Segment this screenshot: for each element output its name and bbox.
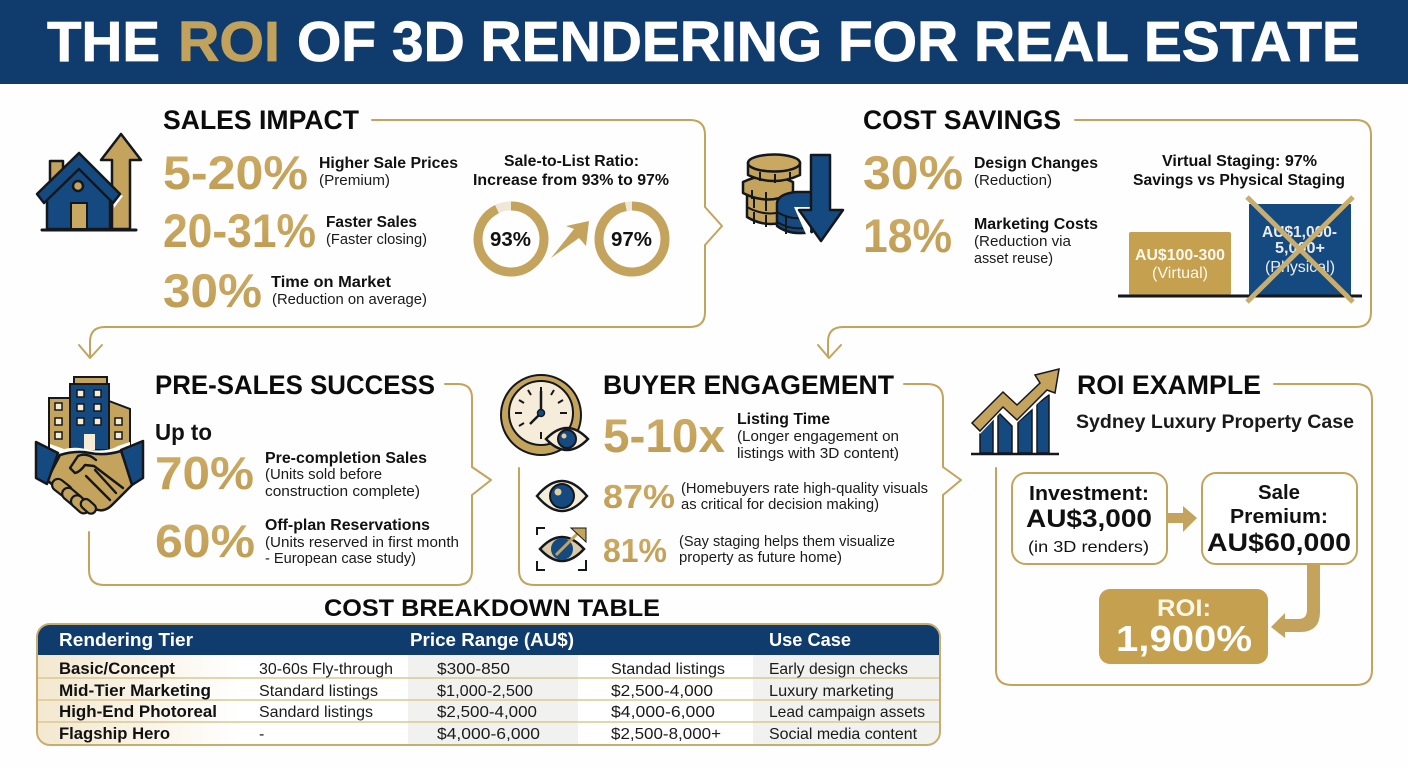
table row: high-end photoreal: $4,000-6,000 [611,704,715,721]
stat: 81% staging: 81% [603,532,667,569]
icon: eye [537,481,587,511]
stat: off-plan reservations: (Units reserved in first month [265,535,459,551]
stat: off-plan reservations: - European case study) [265,551,416,567]
table row: basic/concept: Basic/Concept [59,660,176,678]
table row: mid-tier marketing: Mid-Tier Marketing [59,682,211,700]
icon: eye with framing brackets and arrow [537,528,586,570]
box: sale premium: Premium: [1230,506,1328,528]
bar: virtual staging cost [1129,232,1231,295]
stat: higher sale prices [163,146,458,199]
stat: time on market: 30% [163,264,262,317]
stat: marketing costs: (Reduction via [974,234,1072,250]
stat: 81% staging: (Say staging helps them visualize [679,534,895,550]
stat: listing time: listings with 3D content) [737,446,899,462]
table header row: Use Case [769,630,851,650]
stat: faster sales [163,204,427,257]
box: investment: Investment: [1029,483,1149,505]
stat: marketing costs [863,209,1098,267]
stat: pre-completion sales: 70% [155,447,254,499]
stat: marketing costs: Marketing Costs [974,216,1098,233]
stat: listing time: 5-10x [603,409,725,462]
sale-to-list ratio heading [473,153,669,189]
table row: high-end photoreal: Sandard listings [259,704,373,721]
table row: mid-tier marketing: $1,000-2,500 [437,683,533,700]
stat: listing time: Listing Time [737,411,830,428]
table row: high-end photoreal: Lead campaign assets [769,704,925,721]
box: investment: AU$3,000 [1026,505,1152,533]
stat: design changes: Design Changes [974,155,1098,172]
stat: 87% high-quality visuals [603,478,928,515]
table header row [59,630,851,650]
title banner: THE [47,10,160,74]
bar: physical staging cost, crossed out: (Physical) [1265,259,1335,276]
donut chart: 93% [478,206,544,272]
table row: basic/concept: Standad listings [611,661,725,678]
donut chart: 93%: 93% [490,229,531,251]
stat: pre-completion sales: construction complete) [265,484,420,500]
stat: 81% staging [603,532,895,569]
table row: basic/concept [59,660,908,678]
table row: flagship hero: Flagship Hero [59,725,170,743]
icon: coins with down arrow [743,154,843,248]
table row: high-end photoreal: $2,500-4,000 [437,704,537,721]
stat: off-plan reservations [155,515,459,567]
arrow: premium to roi [1271,565,1320,638]
stat: faster sales: 20-31% [163,204,316,257]
virtual staging heading: Virtual Staging: 97% [1162,153,1317,170]
heading: sales impact: SALES IMPACT [163,105,359,135]
stat: 81% staging: property as future home) [679,550,842,566]
stat: pre-completion sales: Up to [155,419,212,445]
box: sale premium: Sale [1258,482,1300,504]
table row: flagship hero [59,725,918,743]
stat: design changes: (Reduction) [974,173,1052,189]
bar: physical staging cost, crossed out [1118,197,1362,302]
stat: 87% high-quality visuals: (Homebuyers rate high-quality visuals [681,481,928,497]
table: cost breakdown [37,624,940,745]
heading: buyer engagement: BUYER ENGAGEMENT [603,370,894,400]
stat: time on market: Time on Market [271,274,392,291]
table row: mid-tier marketing: Standard listings [259,683,378,700]
box: investment [1012,473,1167,564]
stat: 87% high-quality visuals: 87% [603,478,675,515]
box: roi result: ROI: [1157,595,1211,622]
table row: flagship hero: - [259,726,264,743]
stat: marketing costs: 18% [863,209,952,262]
stat: higher sale prices: Higher Sale Prices [319,155,458,172]
arrow: investment to premium [1167,506,1197,532]
table row: basic/concept: 30-60s Fly-through [259,661,393,678]
donut chart: 97%: 97% [611,229,652,251]
subheading: sydney case: Sydney Luxury Property Case [1076,412,1354,433]
panel: pre-sales success [36,370,491,585]
table row: basic/concept: Early design checks [769,661,908,678]
bar: virtual staging cost: (Virtual) [1152,265,1208,282]
stat: design changes: 30% [863,146,963,199]
virtual staging heading [1133,153,1345,189]
stat: 87% high-quality visuals: as critical for decision making) [681,497,879,513]
stat: time on market: (Reduction on average) [272,292,427,308]
box: sale premium [1202,473,1357,564]
table row: mid-tier marketing: Luxury marketing [769,683,894,700]
sale-to-list ratio heading: Sale-to-List Ratio: [504,153,639,170]
panel: cost savings [743,105,1371,358]
heading: cost savings: COST SAVINGS [863,105,1061,135]
table row: flagship hero: $2,500-8,000+ [611,726,721,743]
stat: off-plan reservations: 60% [155,515,255,567]
virtual staging heading: Savings vs Physical Staging [1133,172,1345,189]
heading: pre-sales success: PRE-SALES SUCCESS [155,370,435,400]
icon: clock with eye [501,375,588,455]
stat: time on market [163,264,427,317]
stat: marketing costs: asset reuse) [974,251,1053,267]
bar: physical staging cost, crossed out: AU$1,000- [1262,224,1337,241]
box: roi result: 1,900% [1116,618,1252,659]
box: roi result [1099,589,1268,664]
bar: virtual staging cost: AU$100-300 [1135,247,1225,264]
panel: buyer engagement [501,370,961,585]
table row: mid-tier marketing [59,682,894,700]
stat: higher sale prices: 5-20% [163,146,308,199]
arrow: ratio increase [551,221,589,258]
title banner [0,0,1408,84]
table row: flagship hero: $4,000-6,000 [437,726,540,743]
table header row: Price Range (AU$) [410,630,574,650]
icon: buildings and handshake [36,377,143,516]
stat: listing time [603,409,899,462]
stat: pre-completion sales: Pre-completion Sales [265,450,427,467]
donut chart: 97% [599,206,665,272]
stat: pre-completion sales [155,419,427,500]
panel: roi example [971,369,1372,685]
table row: basic/concept: $300-850 [437,661,510,678]
panel: sales impact [37,105,722,358]
heading: roi example: ROI EXAMPLE [1077,370,1261,400]
icon: house with rising arrow [37,134,141,230]
bar: physical staging cost, crossed out: 5,000+ [1275,240,1325,257]
stat: faster sales: (Faster closing) [326,232,427,248]
table row: mid-tier marketing: $2,500-4,000 [611,683,713,700]
stat: higher sale prices: (Premium) [319,173,390,189]
title banner: ROI [178,10,280,74]
stat: faster sales: Faster Sales [326,214,417,231]
stat: listing time: (Longer engagement on [737,429,899,445]
table row: high-end photoreal: High-End Photoreal [59,703,217,721]
stat: design changes [863,146,1098,199]
table row: high-end photoreal [59,703,925,721]
box: investment: (in 3D renders) [1028,539,1149,556]
sale-to-list ratio heading: Increase from 93% to 97% [473,172,669,189]
box: sale premium: AU$60,000 [1207,529,1351,557]
stat: pre-completion sales: (Units sold before [265,467,382,483]
table header row: Rendering Tier [59,630,193,650]
heading: cost breakdown table: COST BREAKDOWN TABLE [324,595,660,622]
icon: rising bar chart with arrow [971,369,1059,454]
stat: off-plan reservations: Off-plan Reservations [265,517,430,534]
table row: flagship hero: Social media content [769,726,918,743]
title banner: OF 3D RENDERING FOR REAL ESTATE [297,10,1360,74]
